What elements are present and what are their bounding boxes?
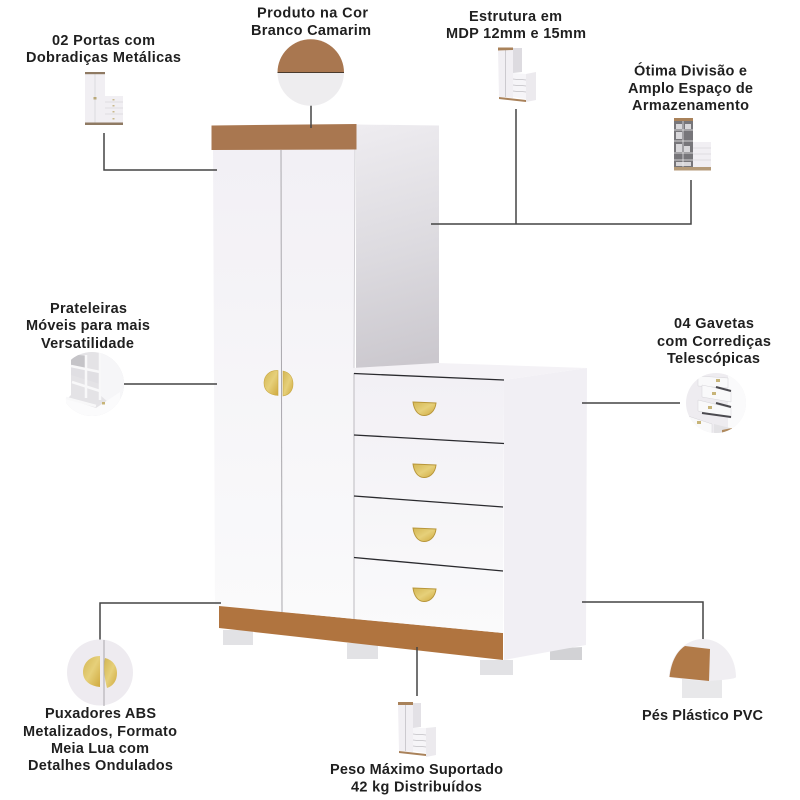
label: storage: Armazenamento xyxy=(632,98,749,114)
label: doors: 02 Portas com xyxy=(52,33,155,49)
leader line: feet xyxy=(582,602,703,640)
label: drawers: 04 Gavetas xyxy=(674,316,754,332)
wardrobe product xyxy=(212,124,587,675)
label: handles: Puxadores ABS xyxy=(45,706,156,722)
icon: handle detail xyxy=(67,640,133,706)
label: structure: MDP 12mm e 15mm xyxy=(446,26,586,42)
leader line: drawers xyxy=(582,402,680,404)
leader line: doors xyxy=(104,133,217,170)
icon: open drawers xyxy=(686,373,732,433)
label: colour xyxy=(251,6,371,39)
doors xyxy=(213,149,355,619)
label: handles: Metalizados, Formato xyxy=(23,724,177,740)
label: doors: Dobradiças Metálicas xyxy=(26,50,181,66)
label: shelves: Versatilidade xyxy=(41,336,134,352)
label: drawers: com Corrediças xyxy=(657,334,771,350)
icon: foot detail xyxy=(669,639,736,698)
leader line: shelves xyxy=(121,383,217,385)
label: storage xyxy=(628,62,753,114)
chest side xyxy=(504,368,587,660)
label: handles xyxy=(23,706,177,774)
label: handles: Meia Lua com xyxy=(51,741,149,757)
icon: shelves detail xyxy=(66,352,124,416)
drawer handles xyxy=(413,402,436,602)
leader line: structure and storage xyxy=(431,180,691,224)
label: structure xyxy=(446,9,586,42)
label: doors xyxy=(26,33,181,66)
drawers xyxy=(354,373,504,633)
tower side panel xyxy=(356,124,439,368)
door divider xyxy=(281,150,282,612)
label: shelves xyxy=(26,301,150,352)
icon: front view of furniture xyxy=(85,72,123,125)
brown base xyxy=(219,606,503,660)
leader line: handles xyxy=(100,603,221,640)
icon: furniture for weight xyxy=(398,702,436,757)
label: handles: Detalhes Ondulados xyxy=(28,758,173,774)
brown top xyxy=(212,124,356,150)
feet xyxy=(223,630,582,675)
icon: open interior xyxy=(674,118,711,170)
leader line: weight xyxy=(416,647,418,696)
chest top xyxy=(353,363,587,380)
label: weight xyxy=(330,762,503,796)
label: drawers: Telescópicas xyxy=(667,351,760,367)
label: weight: 42 kg Distribuídos xyxy=(351,780,482,796)
door knobs xyxy=(264,370,293,396)
icon: furniture perspective xyxy=(498,48,536,102)
label: storage: Amplo Espaço de xyxy=(628,81,753,97)
label: drawers xyxy=(657,316,771,367)
label: colour: Produto na Cor xyxy=(257,6,368,22)
leader line: colour xyxy=(310,105,312,128)
label: shelves: Prateleiras xyxy=(50,301,127,317)
label: feet: Pés Plástico PVC xyxy=(642,708,764,724)
label: shelves: Móveis para mais xyxy=(26,318,150,334)
label: storage: Ótima Divisão e xyxy=(634,62,747,80)
label: weight: Peso Máximo Suportado xyxy=(330,762,503,778)
label: colour: Branco Camarim xyxy=(251,23,371,39)
icon: colour swatch xyxy=(278,39,344,106)
leader line: structure xyxy=(515,109,517,224)
label: structure: Estrutura em xyxy=(469,9,562,25)
